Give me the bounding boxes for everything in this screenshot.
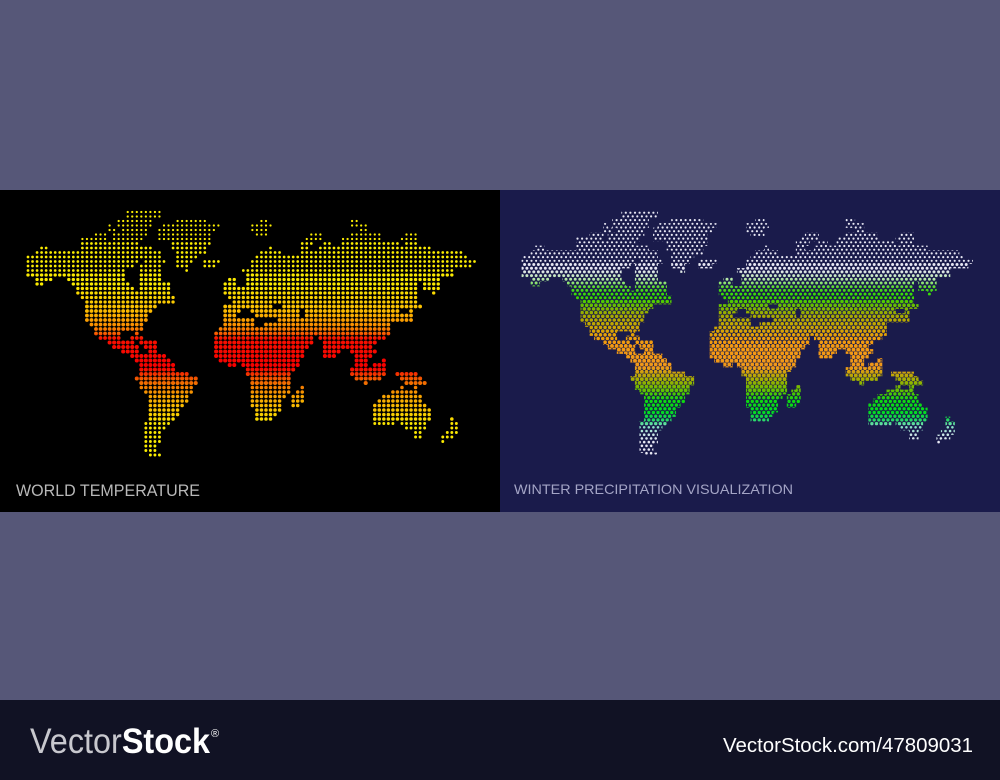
image id url: VectorStock.com/47809031 [723, 735, 973, 757]
panel: winter precipitation [500, 190, 1000, 512]
heading: winter precipitation visualization: WINTER PRECIPITATION VISUALIZATION [514, 481, 793, 497]
registered mark: ® [211, 728, 219, 740]
footer background [0, 700, 1000, 780]
panel background: black [0, 190, 500, 512]
panel background: navy [500, 190, 1000, 512]
heading: world temperature: WORLD TEMPERATURE [16, 482, 200, 500]
footer bar [0, 700, 1000, 780]
logo: VectorStock: VectorStock [30, 722, 210, 761]
panel: world temperature [0, 190, 500, 512]
infographic canvas [0, 190, 1000, 780]
dot map: temperature [28, 212, 475, 455]
dot map: precipitation [520, 213, 977, 453]
